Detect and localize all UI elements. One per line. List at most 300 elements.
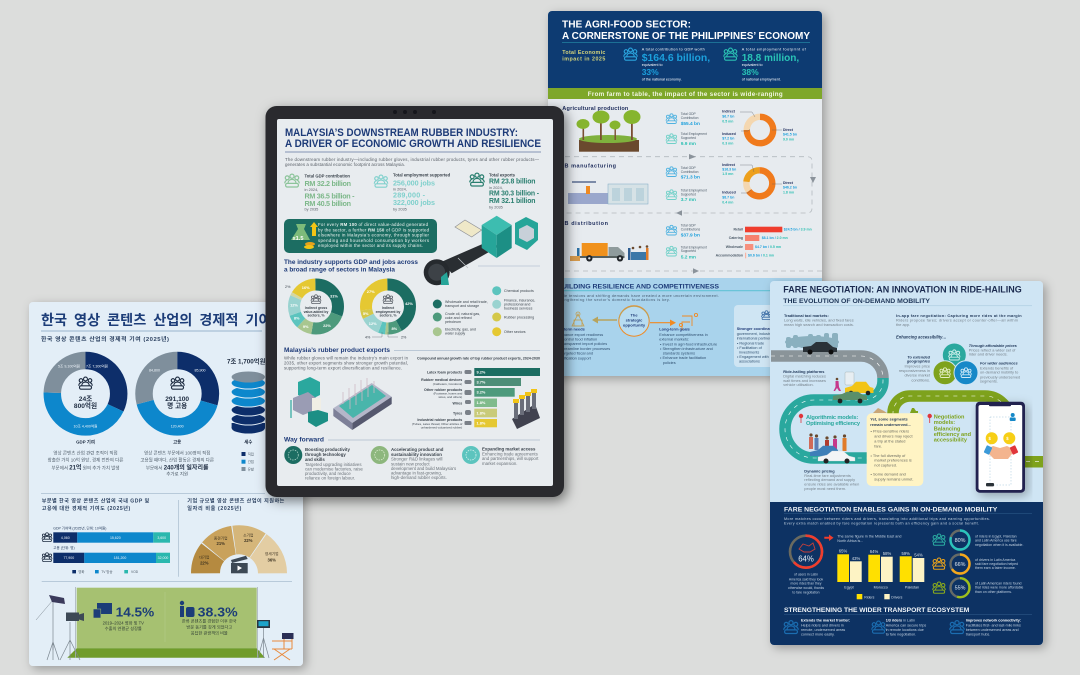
stat: employment [374,173,451,212]
donut: employment by sector: 4% [365,336,371,340]
icons: ecosystem [784,621,964,634]
donut labels: manufacturing [722,163,797,204]
icon: employment hand [724,48,737,60]
intro: gains [784,517,990,525]
legend: sectors: Wholesale and retail trade, [445,300,488,304]
text: long-term goals [659,327,717,365]
strategic opportunity circle: strategic [626,318,643,322]
text: algorithmic models: Optimising efficiency [806,421,861,427]
text: mid-term needs: • Targeted fiscal and [558,351,593,356]
stacked bars: GDP and jobs [42,525,170,574]
agri title [562,20,810,42]
icons: product rows [464,370,472,425]
stat: exports: in 2024, [489,185,503,190]
donut: value-added by sector: 9% [303,324,309,329]
legend: sectors: coke and refined [445,316,472,320]
bar chart: distribution segments: $4.7 bn / 0.5 mn [755,245,781,249]
text: ecosystem columns: Extends the market frontier: [801,619,850,623]
paragraph: jobs multiplier: 고용될 때마다, 산업 활동은 경제의 다른 [140,456,214,463]
text: bar chart intro: The same figure in the Middle East and [837,534,901,538]
donut: employment: 85,900 [194,368,206,372]
stat: 14.5%: 14.5% [116,605,155,620]
donut: employment by sector: 2% [401,336,407,340]
bar labels: (Tubes, Latex thread, Other articles of [412,422,462,426]
paragraph: jobs multiplier: 영상 콘텐츠 부문에서 100명의 직접 [144,449,210,456]
card: stronger coordination: • Regional trade [737,342,764,346]
resilience intro: Trade tensions and shifting demands have created a more uncertain environment. [556,294,719,298]
illustration: camera [60,612,84,660]
heading: F&B distribution: F&B distribution [556,221,609,227]
heading: way forward: Way forward [284,437,324,444]
rubber title [285,127,541,150]
illustration: phone with handshake [976,402,1025,493]
text: negotiation models: efficiency and [934,432,972,438]
half donut: firm size: 소기업 [243,533,253,538]
text: bar chart intro: North Africa is... [837,539,863,543]
donut: employment by sector: 27% [367,289,375,294]
stats: manufacturing: Contribution [681,170,699,174]
donut labels: agricultural production [722,110,797,145]
chart: tax stack: 간접 [248,459,254,464]
illustration: monitor on tripod [257,620,270,658]
text: dynamic pricing: people most need them. [804,486,846,491]
way forward: market access: and partnerships, will support [482,456,539,461]
text: extended geographies: responsiveness in [899,368,930,373]
text: ring descriptions [975,534,1023,594]
text: dynamic pricing: reflecting demand and supply [804,477,855,482]
text: ride-hailing platforms: Ride-hailing platforms [783,369,824,374]
GDP stat: $164.6 billion, [642,52,710,64]
legend: sectors: professional and [504,302,530,306]
text: negotiation models: Negotiation [934,414,965,420]
card: stronger coordination: associations [739,360,760,364]
way forward: productivity: reliance on foreign labour. [305,476,355,480]
text: mid-term needs: • Streamline border processes [558,346,610,351]
text: 64% description: of users in Latin [794,573,818,577]
donut: value-added by sector [285,284,338,329]
bar labels: Rubber medical devices [421,378,462,382]
donut labels: agricultural production: Induced [722,132,736,136]
tablet cameras [393,110,436,114]
legend: sectors: Rubber processing [504,316,534,320]
arrows: dashed flow line [556,154,822,274]
paragraph: jobs multiplier: 추가로 지원 [166,470,188,478]
text: long-term goals: standards systems [663,350,695,355]
ring: 64%: 64% [798,555,814,564]
heading: agricultural production: Agricultural production [562,106,629,112]
intro: gains: More matches occur between riders and drivers, translating into additional trips and earning opportunities. [784,517,990,521]
text: exports description [284,356,409,370]
callout: underserved segments: supply remains unmet. [874,476,913,481]
total economic impact label: Total Economic [562,50,605,56]
text: exports description: supporting long-term export diversification and resilience. [284,365,402,370]
legend: sectors: Electricity, gas, and [445,328,476,332]
stats: distribution: Supported [681,249,696,253]
callout: multiplier: by the sector, a further RM 150 of GDP is supported [318,227,430,232]
way forward: innovation: Stronger R&D linkages will [391,457,442,462]
text: in-app negotiation: Enhancing accessibility… [896,334,947,339]
text: extended geographies: geographies [906,359,931,364]
GDP stat: 33% [642,67,659,77]
text: ecosystem columns: Facilitates first- and last-mile links [966,624,1021,628]
donut 1 center: Indirect gross [305,306,327,310]
donut: employment: 291,100 [165,396,189,403]
paragraph: jobs multiplier: 부문에서 240개의 일자리를 [146,463,209,471]
stat: GDP contribution: in 2024, [304,187,318,192]
text: ecosystem columns: Helps riders and drivers in [801,624,844,628]
text: traditional taxi markets: Long waits, idle vehicles, and fixed fares [784,318,854,323]
donut labels: agricultural production: 0.3 mn [722,141,733,145]
text: ring descriptions: of riders in Egypt, Pakistan [975,534,1017,538]
stat: 14.5%: 수출의 연평균 성장률 [105,625,142,632]
text: ecosystem columns: in remote locations due [886,628,924,632]
callout: underserved segments: • Price-sensitive riders [870,429,909,434]
stat: 38.3% [180,601,238,636]
text: wider audiences: Extends benefits of [980,365,1014,370]
strategic opportunity circle: The [630,312,638,318]
donut 2 center [376,295,401,318]
bar chart: CAGR: 9.2% [476,369,486,374]
donut: employment by sector: 5% [363,311,369,316]
text: dynamic pricing: Real-time fare adjustments [804,473,851,478]
green screen backdrop [67,587,265,658]
marker: algorithmic models [799,414,803,423]
donut: employment [144,360,210,428]
legend: sectors: petroleum [445,320,461,324]
bar chart: riders and drivers: 58% [883,551,891,556]
donut labels: manufacturing: Indirect [722,163,736,167]
strategic opportunity circle: opportunity [623,322,646,328]
donut: GDP contribution [52,360,119,428]
callout: underserved segments: • The full diversity of [870,453,906,458]
stat: exports: Total exports [489,173,516,178]
way forward: market access: market expansion. [482,461,518,466]
section: building resilience [548,278,822,376]
text: mid-term needs: • Transparent import policies [558,341,607,346]
text: exports description: While rubber gloves will remain the industry’s main export in [284,356,409,360]
stat: exports: RM 30.3 billion - [489,191,540,198]
panel: Philippines agri-food infographic [548,11,822,376]
text: affordable prices [969,343,1018,357]
card: stronger coordination: government, industry [737,332,772,336]
text: long-term goals: • Strengthen infrastructure and [660,346,713,351]
donut labels: manufacturing: Direct [783,181,794,185]
text: long-term goals: Long-term goals [659,327,690,332]
rubber title: A DRIVER OF ECONOMIC GROWTH AND RESILIENCE [285,138,541,150]
GDP stat: of the national economy. [642,78,682,82]
text: long-term goals: • Enhance trade facilitation [660,355,706,360]
total economic impact label [562,50,605,63]
half donut: firm size: 36% [268,557,276,562]
callout: multiplier: For every RM 100 of direct value-added generated [318,222,429,227]
donut labels: agricultural production: 9.0 mn [783,138,794,142]
icon: mid-term needs [572,312,584,326]
stacked bars: GDP and jobs: 32,000 [158,556,168,560]
card: stronger coordination: • Facilitation of [737,346,763,350]
text: long-term goals: policies [663,360,676,365]
resilience intro [556,294,719,302]
card: stronger coordination: • Engagement with [737,355,769,359]
way forward: productivity: Boosting productivity [305,447,350,452]
bar chart: riders and drivers: Egypt [844,585,854,589]
text: exports description: 2035, other export segments show stronger growth potential, [284,360,408,366]
employment stat: A total employment footprint of [742,48,807,52]
callout: multiplier: elsewhere in Malaysia’s economy, through supplier [318,232,430,238]
text: ring descriptions: and Latin America use fare [975,539,1017,543]
illustration: glove dipping line [333,378,392,430]
stat: GDP contribution: by 2035 [304,206,318,212]
donut 1 center: sectors, % [308,314,324,318]
callout: multiplier [284,219,437,253]
stacked bars: GDP and jobs: 3,600 [157,536,166,540]
callout: underserved segments: Yet, some segments [870,417,908,422]
ring stats [933,530,1023,597]
bar chart: riders and drivers: 54% [914,553,923,558]
section: dark gains panel [770,502,1043,645]
fare subtitle: THE EVOLUTION OF ON-DEMAND MOBILITY [783,298,931,305]
half donut: firm size: 21% [217,541,225,546]
stats: distribution: $37.9 bn [681,233,700,239]
bar chart: distribution segments: Accommodation [716,254,743,258]
donut: employment: 명 고용 [167,401,187,410]
text: extended geographies [899,354,931,382]
stats: distribution [666,224,707,260]
text: negotiation models: accessibility [934,438,968,444]
bar chart: riders and drivers: Morocco [874,585,888,589]
green band: From farm to table, the impact of the sector is wide-ranging [588,91,783,98]
donut labels: agricultural production: $6.7 bn [722,115,734,119]
stats: agricultural production [666,112,707,147]
rubber intro: The downstream rubber industry—including rubber gloves, industrial rubber products, tyres and other rubber products— [285,157,540,162]
half donut: firm size: 중견기업 [214,535,227,540]
employment stat: 18.8 million, [742,52,799,64]
icon: money bag multiplier: x1.5 [293,236,303,242]
text: ring descriptions: that rides were more affordable [975,586,1023,590]
legend: sectors: business services [504,306,533,310]
heading: jobs by firm size: 기업 규모별 영상 콘텐츠 산업이 지원하는 [187,498,285,505]
stat: employment: Total employment supported [393,173,451,178]
donut labels: manufacturing: 0.4 mn [722,200,733,204]
donut: manufacturing [746,170,772,196]
resilience heading: BUILDING RESILIENCE AND COMPETITIVENESS [557,283,719,290]
text: wider audiences: segments. [980,379,998,384]
donut: employment: 84,800 [149,368,160,372]
stacked bars: GDP and jobs: 77,900 [63,556,74,560]
bar labels: Industrial rubber products [417,418,462,422]
legend: riders drivers [857,594,903,599]
text: mid-term needs: of control food inflation [558,336,597,342]
icon: GDP people [79,377,92,389]
way forward: innovation: development and build Malaysia’s [391,466,457,471]
chart title: CAGR: Compound annual growth rate of top rubber product exports, 2024-2030 [417,357,540,361]
text: ride-hailing platforms [783,369,826,387]
donut: GDP contribution: 5조 9,100억원 [58,364,80,368]
employment stat [742,48,807,82]
stats: distribution: Total GDP [681,224,697,228]
bar labels: Tyres [453,412,462,416]
donut labels: manufacturing: $46.2 bn [783,186,797,190]
agri header band [548,11,822,88]
donut: GDP contribution: 24조 [79,395,92,403]
heading: sector contribution [42,498,150,512]
stats: agricultural production: Contribution [681,116,699,120]
way forward: innovation: Accelerating product and [391,447,444,452]
stat: 38.3%: 응답한 관광객의 비율 [191,630,228,636]
text: dynamic pricing: ensure rides are available when [804,482,859,487]
legend: sectors: Crude oil, natural gas, [445,312,480,316]
bar labels: (Catheters, Condoms) [433,382,462,386]
half donut: firm size: 22% [244,538,253,543]
paragraph: GDP multiplier: 영상 콘텐츠 산업 관련 조직이 직접 [53,449,118,456]
way forward: innovation: high-demand rubber exports. [391,475,447,480]
stats: manufacturing: 3.7 mn [681,197,696,203]
callout: underserved segments [867,408,923,486]
paragraph: GDP multiplier: 창출한 가치 10억 원당, 경제 전반의 다른 [48,456,123,463]
donut: GDP contribution: 10조 4,400억원 [74,424,97,428]
stats: agricultural production: 9.9 mn [681,141,696,147]
half donut: firm size: 22% [200,560,209,566]
donut labels: manufacturing: 1.8 mn [783,190,794,194]
stat: 14.5% [93,603,155,632]
text: ecosystem columns: connect more easily. [801,632,835,636]
bar labels [412,370,463,429]
rubber intro [285,157,540,167]
legend: sectors: Chemical products [504,289,534,293]
legend: riders drivers: Riders [864,595,875,599]
text: long-term goals: external markets: [659,337,689,342]
text: ecosystem columns: 1/3 riders in Latin [886,619,915,623]
text: negotiation models: models: [934,420,955,426]
way forward: market access: Expanding market access [482,447,536,452]
bar chart: riders and drivers [837,549,924,599]
stat: 38.3%: 한류 콘텐츠를 경험한 이후 한국 [182,618,237,624]
text: ecosystem columns: to fare negotiation. [886,632,916,636]
arrow: to mid-term [592,316,617,324]
legend: stacked bars: 영화 [78,569,84,574]
chart: tax stack: 유발 [248,467,254,472]
bar chart: distribution segments: $24.5 bn / 3.9 mn [784,228,812,232]
callout: underserved segments: remain underserved... [870,422,911,427]
text: 64% description [788,573,824,595]
way forward: productivity: through technology [305,452,346,457]
icon: employment people [171,377,184,389]
chart: tax stack [227,356,266,472]
text: affordable prices: rider and driver needs. [969,352,1008,357]
arrow: to bar chart [824,534,834,541]
stat: GDP contribution: Total GDP contribution [304,174,350,178]
text: in-app negotiation: In-app fare negotiation: Capturing more rides at the margin [896,313,1022,318]
bar chart: CAGR: 1.8% [476,410,486,415]
stat: exports: RM 23.8 billion [489,178,536,186]
half donut: firm size: 영세기업 [265,551,278,556]
resilience intro: Strengthening the sector’s domestic foundations is key. [556,298,670,302]
bar labels: (Footwear, hoses and [433,392,463,396]
text: 64% description: otherwise would, thanks [788,586,824,590]
donut captions [76,438,181,446]
donut labels: agricultural production: $7.2 bn [722,136,734,140]
bar chart: riders and drivers: 64% [870,549,878,554]
illustration: crowd and cars for dynamic pricing [809,433,855,464]
legend: sectors: transport and storage [445,304,479,308]
bar chart: CAGR: 1.8% [476,400,486,405]
stats: agricultural production: Total Employment [681,132,707,136]
text: in-app negotiation: Riders propose fares; drivers accept or counter-offer—all within [896,318,1018,323]
text: extended geographies: To extended [907,354,931,359]
rubber intro: generates a substantial economic footprint across Malaysia. [285,162,405,167]
bar labels: unhardened vulcanized rubber) [421,425,462,429]
rubber title: MALAYSIA’S DOWNSTREAM RUBBER INDUSTRY: [285,127,518,139]
way forward: innovation: sustain new product [391,461,430,466]
text: ring descriptions: negotiation when it is available. [975,543,1023,547]
illustration: phone with handshake: $ [1006,436,1009,441]
bar chart: riders and drivers: 59% [902,551,910,556]
donut 2 center: employment by [376,310,401,314]
stat: GDP contribution [285,174,355,212]
illustration: yellow fixtures [512,389,540,429]
stats: agricultural production: $55.4 bn [681,121,700,127]
illustration: trees [576,110,640,152]
bar chart: distribution segments: $0.6 bn / 0.1 mn [748,254,774,258]
text: ecosystem columns: between underserved areas and [966,628,1019,632]
stat: employment: by 2035 [393,206,407,212]
text: mid-term needs [556,327,610,360]
heading: sectors [284,259,418,274]
donut: value-added by sector: 16% [302,285,310,290]
way forward: market access: Enhancing trade agreements [482,452,539,457]
Korean subtitle: 한국 영상 콘텐츠 산업의 경제적 기여 (2025년) [41,335,169,343]
stat: employment: in 2024, [393,186,407,192]
paragraph: GDP multiplier: 부문에서 21억 원의 추가 가치 발생 [51,463,120,471]
way forward: productivity: productivity, and reduce [305,471,351,476]
employment stat: equivalent to [742,63,763,67]
donut: value-added by sector: 2% [285,285,291,289]
stat: GDP contribution: RM 40.5 billion [304,199,351,208]
donut labels: manufacturing: Induced [722,190,736,194]
ring stats: 66% [955,562,966,568]
legend: sectors [433,286,535,336]
text: affordable prices: Through affordable prices [969,343,1018,348]
text: mid-term needs: Mid-term needs [556,327,585,332]
way forward: market access [462,446,539,466]
stat: exports [470,173,540,210]
donut labels: agricultural production: $41.5 bn [783,133,797,137]
fare title: FARE NEGOTIATION: AN INNOVATION IN RIDE-HAILING [783,284,1022,294]
stacked bars: GDP and jobs: 고용 (단위: 명) [53,545,75,550]
bar chart: CAGR: 3.2% [476,390,486,395]
half donut: firm size [199,533,278,573]
total economic impact label: impact in 2025 [562,57,605,63]
donut labels: agricultural production: Indirect [722,110,736,114]
text: extended geographies: conditions. [911,377,930,382]
stats: manufacturing: $71.3 bn [681,174,700,180]
strategic opportunity circle [619,306,649,336]
icon: clapperboard [231,556,248,573]
donut: value-added by sector: 31% [330,294,338,298]
illustration: glove machine [291,377,328,427]
stat: GDP contribution: RM 36.5 billion - [304,192,355,200]
icon: GDP people [624,48,637,60]
legend: stacked bars: VOD [131,570,139,574]
stat: 38.3%: 방문 동기를 갖게 되었다고 [186,624,232,630]
way forward: productivity: Targeted upgrading initiatives [305,462,362,467]
agri title: THE AGRI-FOOD SECTOR: [562,20,691,31]
green band [548,88,822,99]
stat: 38.3%: 38.3% [198,605,238,620]
illustration: taxi dark car [803,342,837,354]
road: gray, teal, green [771,356,1043,462]
legend: stacked bars: TV 방송 [101,569,113,574]
text: bar chart intro [837,534,901,543]
